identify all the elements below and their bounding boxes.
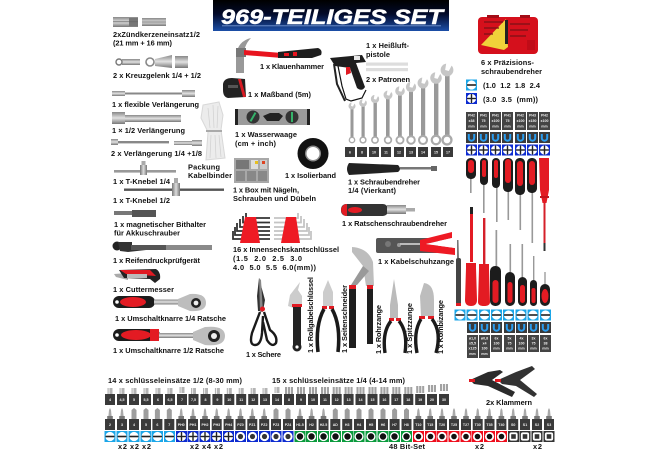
heading: 1/4 sockets: 15 x schlüsseleinsätze 1/4 (4-14 mm): [272, 376, 406, 385]
bit size labels: PH2: [202, 423, 208, 427]
item: side cutters: [317, 280, 349, 353]
item: insulating tape: [285, 138, 336, 180]
bit size labels: PZ4: [285, 423, 291, 427]
item: hot glue gun with cartridges: pistole: [366, 50, 390, 59]
socket size labels: 13: [347, 398, 351, 402]
screwdriver spec labels, top row: [466, 112, 550, 156]
item: hex key set: 16 x Innensechskantschlüssel: [233, 245, 339, 254]
wrench set with sizes: 14: [421, 150, 425, 154]
item: spirit level: (cm + inch): [235, 139, 277, 148]
item: adjustable wrench: [288, 277, 315, 353]
socket size labels: 11: [323, 398, 327, 402]
socket size labels: 18: [406, 398, 410, 402]
screwdriver spec labels, top row: x100: [540, 119, 548, 123]
bit size labels: PH0: [178, 423, 185, 427]
item: precision screwdriver case: 6 x Präzisions-: [481, 58, 535, 67]
socket size labels: 7: [181, 398, 183, 402]
item: hex key set: (1.5 2.0 2.5 3.0: [233, 254, 302, 263]
bit size labels: H1.5: [296, 423, 304, 427]
screwdriver spec labels, top row: x100: [492, 119, 500, 123]
item: ratchet screwdriver: 1 x Ratschenschraubendreher: [342, 219, 447, 228]
item: box of nails and screws: 1 x Box mit Nägeln,: [233, 186, 299, 194]
item: claw hammer: [236, 38, 324, 73]
bit size labels: PH4: [225, 423, 232, 427]
bit size labels: S3: [547, 423, 551, 427]
item: 1/2 extension: 1 × 1/2 Verlängerung: [112, 126, 185, 135]
item: 2 extensions: [111, 139, 202, 158]
socket size labels: 19: [418, 398, 422, 402]
socket size labels: 4: [109, 398, 111, 402]
item: scissors: 1 x Schere: [246, 350, 281, 359]
wrench set with sizes: [345, 62, 453, 157]
socket size labels: 15: [370, 398, 374, 402]
item: universal joints: [113, 55, 201, 80]
socket size labels: 8: [204, 398, 206, 402]
item: magnetic bit holder: 1 x magnetischer Bithalter: [114, 220, 206, 229]
item: ratchet 1/4: 1 x Umschaltknarre 1/4 Ratsche: [115, 314, 226, 323]
item: flexible extension: [112, 90, 199, 109]
socket size labels: 30: [442, 398, 446, 402]
item: T-handle 1/2: 1 x T-Knebel 1/2: [113, 196, 170, 205]
screwdriver spec labels, bottom row: 100: [494, 342, 500, 346]
title banner: 969-TEILIGES SET: [221, 5, 445, 29]
item: tyre pressure gauge: [112, 242, 212, 265]
screwdriver spec labels, bottom row: mm: [518, 346, 525, 350]
item: hex key set: 4.0 5.0 5.5 6.0(mm)): [233, 263, 317, 272]
item: cable ties: Kabelbinder: [188, 171, 232, 180]
screwdriver spec labels, top row: 75: [506, 119, 510, 123]
socket size labels: 11: [239, 398, 243, 402]
bit drive type icons: [104, 431, 554, 442]
screwdriver spec labels, top row: PH2: [541, 114, 548, 118]
screwdriver spec labels, top row: PH1: [504, 114, 511, 118]
item: water pump pliers: [349, 247, 383, 354]
item: quarter inch screwdriver: [347, 163, 437, 195]
socket size labels: 7,5: [191, 398, 196, 402]
socket size labels: 17: [394, 398, 398, 402]
item: cable ties: Packung: [188, 162, 220, 172]
bit size labels: T40: [498, 423, 505, 427]
socket size labels: 8: [288, 398, 290, 402]
item: combination pliers: 1 x Kombizange: [436, 300, 445, 354]
screwdriver spec labels, bottom row: 6x: [544, 336, 548, 340]
screwdriver spec labels, top row: mm: [480, 124, 487, 128]
wrench set with sizes: 10: [372, 150, 376, 154]
item: T-handle 1/4: [113, 161, 176, 186]
bit size labels: PH1: [190, 423, 196, 427]
item: ratchet 1/2: [113, 327, 225, 355]
screwdrivers, bottom row: [456, 207, 550, 306]
bit size labels: T15: [427, 423, 433, 427]
bit size labels: PZ1: [249, 423, 256, 427]
bit size labels: H2.5: [320, 423, 327, 427]
wrench set with sizes: 6: [349, 150, 351, 154]
socket size labels: 6: [157, 398, 159, 402]
socket size labels: 12: [335, 398, 339, 402]
screwdriver spec labels, top row: mm: [517, 124, 524, 128]
item: T-handle 1/4: 1 x T-Knebel 1/4: [113, 177, 171, 186]
wrench set with sizes: 8: [361, 150, 363, 154]
item: hot glue gun with cartridges: [330, 41, 410, 101]
screwdriver spec labels, bottom row: mm: [481, 352, 488, 356]
bit size labels: H7: [392, 423, 397, 427]
bit size labels: PZ2: [261, 423, 267, 427]
item: claw hammer: 1 x Klauenhammer: [260, 62, 324, 71]
screwdriver spec labels, bottom row: x125: [468, 346, 476, 350]
bit size labels: S1: [523, 423, 527, 427]
bit size labels: T10: [415, 423, 422, 427]
bit size labels: PZ0: [237, 423, 244, 427]
bit size labels: H2: [309, 423, 314, 427]
item: box of nails and screws: [233, 158, 316, 203]
wrench set with sizes: 15: [434, 150, 438, 154]
item: spark plug sockets: 2xZündkerzeneinsatz1/2: [113, 30, 200, 39]
screwdriver spec labels, bottom row: 75: [532, 342, 536, 346]
item: precision screwdriver case: schraubendreher: [481, 67, 542, 76]
item: magnetic bit holder: [114, 210, 206, 238]
item: spark plug sockets: (21 mm + 16 mm): [113, 38, 173, 48]
wrench set with sizes: 13: [409, 150, 413, 154]
bit size labels: H5: [369, 423, 373, 427]
item: tyre pressure gauge: 1 x Reifendruckprüfgerät: [113, 256, 201, 265]
screwdriver spec labels, bottom row: ø1,0: [469, 336, 476, 340]
screwdriver spec labels, bottom row: 4x: [520, 336, 524, 340]
item: spark plug sockets: [113, 17, 200, 48]
socket size labels: 9: [216, 398, 218, 402]
screwdriver spec labels, top row: x150: [528, 119, 536, 123]
socket size labels: 10: [311, 398, 315, 402]
item: quarter inch screwdriver: 1/4 (Vierkant): [348, 186, 397, 195]
bit size labels: PH3: [213, 423, 220, 427]
bit size labels: T25: [451, 423, 457, 427]
item: magnetic bit holder: für Akkuschrauber: [114, 228, 180, 238]
socket size labels: 5,5: [144, 398, 148, 402]
bit size labels: 4: [133, 423, 135, 427]
socket size labels: 5: [133, 398, 135, 402]
bit size labels: T27: [463, 423, 469, 427]
screwdriver spec labels, bottom row: mm: [506, 346, 513, 350]
item: scissors: [246, 278, 281, 359]
screwdriver spec labels, bottom row: 75: [508, 342, 512, 346]
socket size labels: 14: [358, 398, 362, 402]
screwdriver spec labels, bottom row: x5,5: [469, 342, 476, 346]
socket size labels: 13: [263, 398, 267, 402]
screwdriver spec labels, bottom row: 3x: [532, 336, 536, 340]
bit size labels: 5: [145, 423, 147, 427]
screwdriver spec labels, bottom row: 100: [482, 346, 488, 350]
screwdriver spec labels, bottom row: ø0,8: [481, 336, 488, 340]
wrench set with sizes: 11: [384, 150, 388, 154]
screwdriver spec labels, top row: mm: [492, 124, 499, 128]
bit size labels: PZ3: [273, 423, 279, 427]
wrench set with sizes: 12: [397, 150, 401, 154]
item: 2 extensions: 2 x Verlängerung 1/4 +1/8: [111, 149, 202, 158]
bit quantity multipliers: [118, 442, 542, 450]
bit size labels: H8: [404, 423, 409, 427]
screwdriver spec labels, top row: mm: [468, 124, 475, 128]
item: spring clamps: [469, 366, 537, 407]
socket size labels: 10: [227, 398, 231, 402]
screwdriver spec labels, top row: PH2: [468, 114, 475, 118]
screwdriver spec labels, bottom row: [454, 310, 551, 358]
socket size labels: 12: [251, 398, 255, 402]
screwdriver spec labels, bottom row: 38: [544, 342, 548, 346]
item: wire crimper: 1 x Kabelschuhzange: [378, 257, 454, 266]
socket size labels: 20: [430, 398, 434, 402]
bit images row: [107, 408, 552, 419]
item: long nose pliers: [384, 279, 414, 354]
screwdriver spec labels, top row: PH3: [529, 114, 536, 118]
item: ratchet 1/4: [113, 294, 226, 323]
item: ratchet screwdriver: [341, 204, 447, 228]
item: universal joints: 2 x Kreuzgelenk 1/4 + 1/2: [113, 71, 201, 80]
bit size labels: AD: [333, 423, 338, 427]
screwdriver spec labels, top row: PH1: [480, 114, 487, 118]
item: cutter: 1 x Cuttermesser: [113, 285, 174, 294]
screwdriver spec labels, bottom row: mm: [530, 346, 537, 350]
bit size labels: H3: [345, 423, 350, 427]
bit size labels: 3: [121, 423, 123, 427]
screwdriver spec labels, bottom row: x4: [482, 342, 486, 346]
screwdriver spec labels, top row: 75: [482, 119, 486, 123]
bit size labels: 7: [168, 423, 170, 427]
screwdriver spec labels, top row: mm: [529, 124, 536, 128]
bit size labels: 6: [156, 423, 158, 427]
item: flexible extension: 1 x flexible Verlängerung: [112, 100, 199, 109]
bit size labels: H6: [381, 423, 385, 427]
socket size labels: 6,5: [168, 398, 172, 402]
item: cable ties: [188, 102, 232, 180]
screwdriver spec labels, bottom row: mm: [493, 346, 500, 350]
item: ratchet 1/2: 1 x Umschaltknarre 1/2 Ratsche: [113, 346, 224, 355]
screwdriver spec labels, top row: mm: [541, 124, 548, 128]
socket size labels: [105, 394, 449, 405]
item: spring clamps: 2x Klammern: [486, 398, 532, 407]
item: precision screwdriver case: [466, 15, 542, 104]
item: cutter: [113, 269, 174, 294]
item: long nose pliers: 1 x Spitzzange: [405, 303, 414, 354]
item: hot glue gun with cartridges: 2 x Patronen: [366, 75, 410, 84]
screwdriver spec labels, top row: PH1: [492, 114, 499, 118]
item: wire crimper: [376, 232, 455, 266]
item: combination pliers: [416, 283, 445, 354]
bit size labels: H4: [357, 423, 361, 427]
item: adjustable wrench: 1 x Rollgabelschlüssel: [306, 277, 315, 353]
bit size labels: T30: [475, 423, 481, 427]
item: spirit level: 1 x Wasserwaage: [235, 130, 297, 139]
socket size labels: 9: [300, 398, 302, 402]
item: hot glue gun with cartridges: 1 x Heißluft-: [366, 41, 410, 50]
item: quarter inch screwdriver: 1 x Schraubendreher: [348, 178, 420, 186]
bit size labels: S0: [511, 423, 515, 427]
screwdriver spec labels, top row: mm: [504, 124, 511, 128]
screwdriver spec labels, bottom row: 100: [518, 342, 524, 346]
item: insulating tape: 1 x Isolierband: [285, 171, 336, 180]
screwdrivers, top row: [466, 158, 549, 251]
screwdriver spec labels, bottom row: mm: [542, 346, 549, 350]
screwdriver spec labels, top row: PH2: [517, 114, 524, 118]
bit size labels: 2: [109, 423, 111, 427]
item: spirit level: [235, 109, 310, 148]
item: precision screwdriver case: (3.0 3.5 (mm)): [483, 95, 539, 104]
screwdriver spec labels, bottom row: mm: [469, 352, 476, 356]
bit size labels: [105, 419, 554, 430]
item: 1/2 extension: [112, 112, 185, 135]
socket size labels: 16: [382, 398, 386, 402]
item: box of nails and screws: Schrauben und Dübeln: [233, 194, 316, 203]
screwdriver spec labels, top row: x100: [516, 119, 524, 123]
item: T-handle 1/2: [113, 178, 224, 205]
screwdriver spec labels, bottom row: 6x: [494, 336, 498, 340]
bit size labels: T35: [486, 423, 493, 427]
wrench set with sizes: 17: [446, 150, 450, 154]
socket size labels: 14: [275, 398, 279, 402]
screwdriver spec labels, top row: x38: [468, 119, 474, 123]
bit size labels: T20: [439, 423, 445, 427]
screwdriver spec labels, bottom row: 5x: [508, 336, 512, 340]
socket images row: [108, 384, 448, 394]
bit size labels: S2: [535, 423, 539, 427]
item: precision screwdriver case: (1.0 1.2 1.8 2.4: [483, 81, 541, 90]
item: side cutters: 1 x Seitenschneider: [340, 285, 349, 353]
socket size labels: 4,5: [120, 398, 124, 402]
item: tape measure: 1 x Maßband (5m): [248, 90, 312, 99]
item: tape measure: [223, 78, 312, 99]
heading: 1/2 sockets: 14 x schlüsseleinsätze 1/2 (8-30 mm): [108, 376, 243, 385]
item: hex key set: [233, 213, 339, 272]
item: water pump pliers: 1 x Rohrzange: [374, 305, 383, 354]
title banner: [213, 0, 449, 31]
